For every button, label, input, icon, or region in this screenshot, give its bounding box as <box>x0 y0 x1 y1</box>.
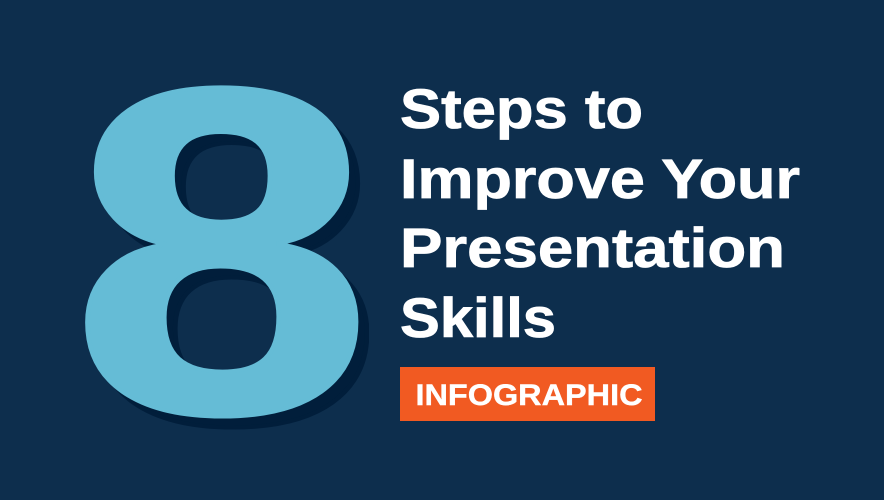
badge background <box>400 367 655 421</box>
title line 2: Improve Your <box>400 147 800 210</box>
title <box>400 77 800 349</box>
big numeral 8 with drop shadow <box>85 85 369 432</box>
title line 3: Presentation <box>400 216 785 279</box>
title line 4: Skills <box>400 286 556 349</box>
badge label: INFOGRAPHIC <box>416 379 642 412</box>
title line 1: Steps to <box>400 77 643 140</box>
infographic badge <box>400 367 655 421</box>
